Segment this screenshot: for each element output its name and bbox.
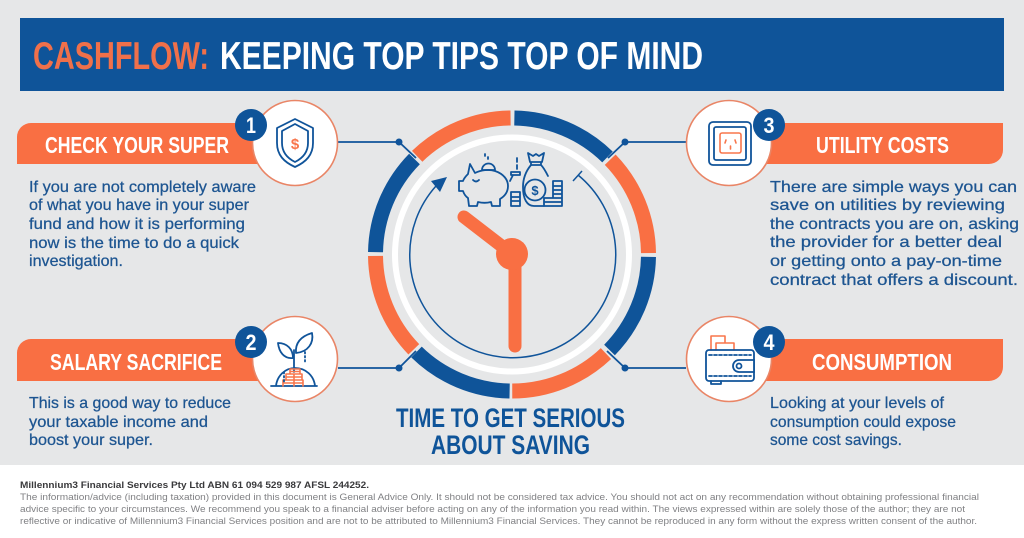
banner 4: CONSUMPTION (812, 349, 952, 375)
clock outer segmented ring (319, 61, 705, 448)
text block 3 (770, 179, 1019, 289)
text block 2: boost your super. (29, 432, 153, 449)
bottom heading: TIME TO GET SERIOUS (396, 403, 625, 433)
footer disclaimer: Millennium3 Financial Services Pty Ltd ABN 61 094 529 987 AFSL 244252. (20, 480, 369, 491)
text block 4: some cost savings. (770, 432, 902, 449)
text block 2: your taxable income and (29, 414, 208, 431)
title banner: CASHFLOW: (33, 35, 209, 78)
banner 3: UTILITY COSTS (816, 132, 949, 158)
banner 4 (760, 339, 1003, 381)
title banner: KEEPING TOP TIPS TOP OF MIND (220, 35, 703, 78)
arrow: circular time arrow (410, 171, 616, 358)
text block 1: of what you have in your super (29, 197, 249, 214)
text block 3: the contracts you are on, asking (770, 216, 1019, 233)
bottom heading (396, 403, 625, 460)
clock (319, 61, 705, 448)
banner 1: CHECK YOUR SUPER (45, 132, 229, 158)
panel: check your super (17, 100, 338, 270)
banner 3 (760, 123, 1003, 164)
text block 1: If you are not completely aware (29, 179, 256, 196)
icon: shield with dollar: $ (291, 136, 300, 153)
text block 3: or getting onto a pay-on-time (770, 253, 1002, 270)
badge 1 (235, 109, 267, 141)
badge 3 (753, 109, 785, 141)
title banner (20, 18, 1004, 91)
footer disclaimer: advice specific to your circumstances. We recommend you speak to a financial adviser before acting on any of the information you read within. The views expressed within are solely those of the author; they are not (20, 503, 965, 514)
panel: consumption (686, 316, 1003, 449)
text block 2: This is a good way to reduce (29, 395, 231, 412)
text block 1 (29, 179, 256, 270)
footer disclaimer (0, 465, 1024, 538)
footer disclaimer: The information/advice (including taxation) provided in this document is General Advice Only. It should not be considered tax advice. You should not act on any recommendation without obtaining professional financial (20, 491, 979, 502)
text block 1: now is the time to do a quick (29, 235, 239, 252)
icon: plant growing from coins (252, 316, 338, 402)
clock hands (464, 217, 528, 346)
text block 3: the provider for a better deal (770, 234, 1002, 251)
panel: salary sacrifice (17, 316, 338, 449)
text block 3: There are simple ways you can (770, 179, 1017, 196)
bottom heading: ABOUT SAVING (431, 430, 590, 460)
footer disclaimer: reflective or indicative of Millennium3 Financial Services position and are not to be attributed to Millennium3 Financial Services. They cannot be reproduced in any form without the express written consent of the author. (20, 515, 977, 526)
icon: power socket (686, 100, 772, 186)
text block 4 (770, 395, 956, 449)
text block 4: Looking at your levels of (770, 395, 945, 412)
text block 1: fund and how it is performing (29, 216, 245, 233)
banner 2: SALARY SACRIFICE (50, 349, 222, 375)
badge 4 (753, 326, 785, 358)
badge 3: 3 (764, 113, 774, 138)
text block 3: save on utilities by reviewing (770, 197, 1005, 214)
icon: wallet (686, 316, 772, 402)
banner 2 (17, 339, 262, 381)
badge 2: 2 (246, 330, 256, 355)
banner 1 (17, 123, 262, 164)
text block 3: contract that offers a discount. (770, 272, 1018, 289)
badge 4: 4 (764, 330, 775, 355)
badge 2 (235, 326, 267, 358)
connector lines (338, 139, 686, 371)
icon: shield with dollar (252, 100, 338, 186)
badge 1: 1 (246, 113, 256, 138)
text block 1: investigation. (29, 253, 123, 270)
icon: piggy bank and money bag (459, 153, 562, 206)
text block 4: consumption could expose (770, 414, 956, 431)
text block 2 (29, 395, 231, 449)
panel: utility costs (686, 100, 1019, 289)
icon: piggy bank and money bag: $ (531, 183, 539, 198)
